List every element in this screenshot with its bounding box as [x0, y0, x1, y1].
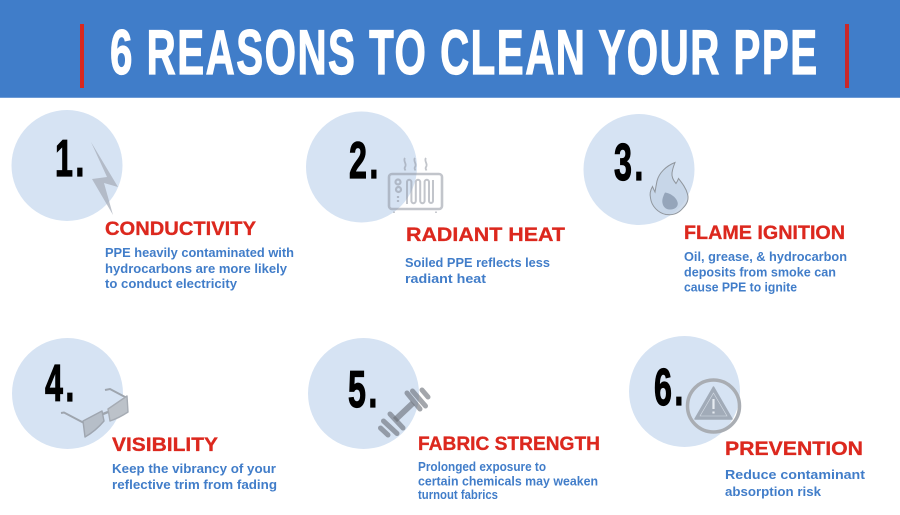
body text: certain chemicals may weaken [418, 474, 598, 488]
left red bar [80, 24, 84, 88]
body text: Oil, grease, & hydrocarbon [684, 249, 847, 264]
number circle 5 [308, 338, 419, 449]
body text [405, 255, 550, 286]
number circle 6 [629, 336, 740, 447]
body text [105, 245, 294, 291]
number circle 1 [12, 110, 122, 221]
body text: absorption risk [725, 484, 822, 499]
number 1: 1. [55, 130, 87, 188]
panel: fabric strength [308, 338, 600, 502]
panel: prevention [629, 336, 866, 499]
body text: to conduct electricity [105, 276, 238, 291]
body text [684, 249, 847, 294]
panel: conductivity [12, 110, 294, 291]
icon: lightning bolt [91, 142, 118, 215]
body text: Prolonged exposure to [418, 459, 546, 474]
body text: hydrocarbons are more likely [105, 261, 288, 276]
body text: cause PPE to ignite [684, 280, 797, 294]
number circle 3 [584, 114, 694, 225]
panel: visibility [12, 338, 277, 492]
number 3: 3. [614, 134, 646, 192]
right red bar [845, 24, 849, 88]
body text: reflective trim from fading [112, 477, 277, 492]
heading: visibility: VISIBILITY [112, 435, 218, 456]
heading: radiant heat: RADIANT HEAT [406, 225, 565, 246]
body text: Keep the vibrancy of your [112, 461, 276, 476]
body text: Reduce contaminant [725, 467, 866, 482]
heading: conductivity: CONDUCTIVITY [105, 219, 256, 240]
number circle 4 [12, 338, 123, 449]
body text: deposits from smoke can [684, 264, 836, 280]
icon: dumbbell [380, 390, 428, 435]
heading: prevention: PREVENTION [725, 439, 863, 460]
heading: flame ignition: FLAME IGNITION [684, 223, 845, 244]
icon: warning sign [688, 380, 740, 432]
panel: flame ignition [584, 114, 847, 294]
heading: fabric strength: FABRIC STRENGTH [418, 434, 600, 455]
icon: glasses [61, 389, 128, 437]
header banner [0, 0, 900, 98]
body text: radiant heat [405, 271, 487, 286]
number 2: 2. [349, 132, 381, 190]
title: 6 REASONS TO CLEAN YOUR PPE [110, 18, 817, 88]
panel: radiant heat [306, 112, 565, 286]
number 6: 6. [654, 359, 686, 417]
number 5: 5. [348, 361, 380, 419]
body text [725, 467, 866, 499]
body text: PPE heavily contaminated with [105, 245, 294, 260]
body text: Soiled PPE reflects less [405, 255, 550, 270]
icon: flame [650, 162, 688, 215]
number circle 2 [306, 112, 417, 222]
icon: heater [389, 158, 442, 213]
number 4: 4. [45, 355, 77, 413]
body text: turnout fabrics [418, 487, 498, 502]
body text [112, 461, 277, 492]
body text [418, 459, 598, 502]
